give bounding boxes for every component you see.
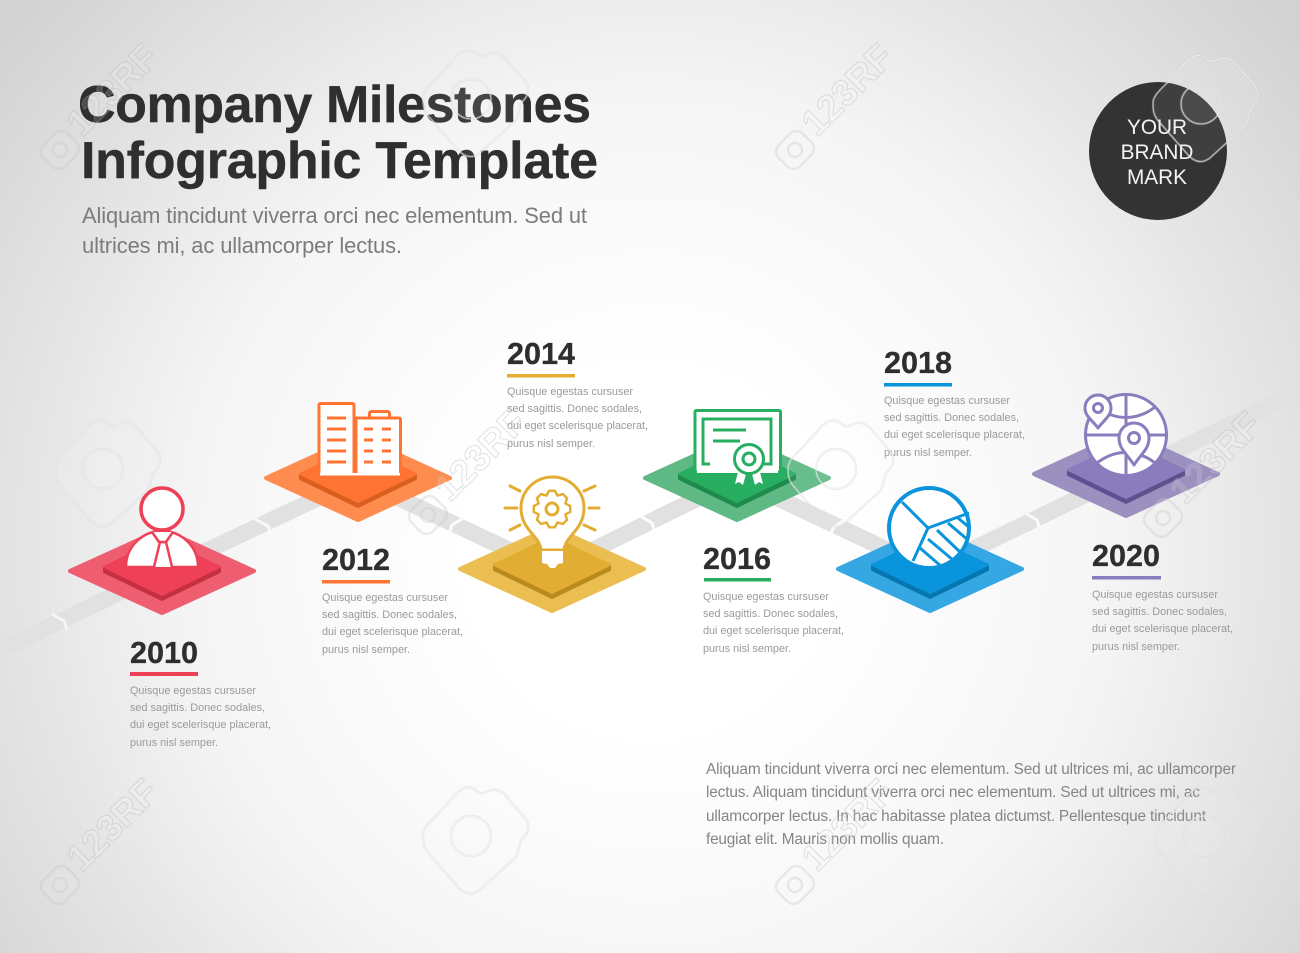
- milestone 2010 text: Quisque egestas cursuser: [130, 685, 256, 697]
- milestone 2020 text: [1092, 539, 1233, 653]
- milestone 2020 text: dui eget scelerisque placerat,: [1092, 623, 1233, 635]
- milestone 2018 text: sed sagittis. Donec sodales,: [884, 412, 1019, 424]
- milestone 2010 text: purus nisl semper.: [130, 737, 218, 749]
- bottom paragraph: feugiat elit. Mauris non mollis quam.: [706, 831, 944, 848]
- title: [78, 76, 598, 190]
- milestone 2014 platform: [460, 527, 644, 611]
- milestone 2012 platform: [266, 436, 450, 520]
- milestone 2018 text: [884, 346, 1025, 459]
- milestone 2020 text: 2020: [1092, 539, 1160, 573]
- milestone 2014 text: Quisque egestas cursuser: [507, 386, 633, 398]
- milestone 2012 text: [322, 543, 463, 656]
- milestone 2016 text: Quisque egestas cursuser: [703, 591, 829, 603]
- subtitle: [82, 203, 587, 258]
- bottom paragraph: Aliquam tincidunt viverra orci nec elementum. Sed ut ultrices mi, ac ullamcorper: [706, 761, 1236, 778]
- watermarks: 123RF: [1162, 404, 1269, 512]
- milestone 2016 text: sed sagittis. Donec sodales,: [703, 608, 838, 620]
- brand mark badge: BRAND: [1121, 141, 1193, 164]
- bottom paragraph: [706, 761, 1236, 848]
- milestone 2016 text: purus nisl semper.: [703, 643, 791, 655]
- milestone 2020 text: purus nisl semper.: [1092, 641, 1180, 653]
- icon: pie chart: [889, 488, 970, 568]
- bottom paragraph: lectus. Aliquam tincidunt viverra orci nec elementum. Sed ut ultrices mi, ac: [706, 784, 1200, 801]
- milestone 2012 text: sed sagittis. Donec sodales,: [322, 609, 457, 621]
- milestone 2014 text: dui eget scelerisque placerat,: [507, 420, 648, 432]
- milestone 2020 platform: [1034, 432, 1218, 516]
- milestone 2014 text: 2014: [507, 337, 575, 371]
- icon: globe with map pins: [1085, 394, 1166, 476]
- icon: light bulb with gear: [505, 477, 599, 568]
- title: Infographic Template: [81, 132, 598, 190]
- icon: office buildings: [319, 404, 400, 476]
- brand mark badge: YOUR: [1127, 116, 1187, 139]
- bottom paragraph: ullamcorper lectus. In hac habitasse platea dictumst. Pellentesque tincidunt: [706, 808, 1207, 825]
- milestone 2016 platform: [645, 436, 829, 520]
- milestone 2014 text: sed sagittis. Donec sodales,: [507, 403, 642, 415]
- milestone 2016 text: [703, 542, 844, 655]
- milestone 2012 text: purus nisl semper.: [322, 644, 410, 656]
- milestone 2018 text: Quisque egestas cursuser: [884, 395, 1010, 407]
- icon: certificate with seal: [695, 410, 780, 485]
- watermarks: 123RF: [427, 401, 534, 509]
- milestone 2010 text: [130, 636, 271, 749]
- brand mark badge: MARK: [1127, 166, 1187, 189]
- milestone 2012 text: 2012: [322, 543, 390, 577]
- milestone 2020 text: Quisque egestas cursuser: [1092, 589, 1218, 601]
- milestone 2010 text: sed sagittis. Donec sodales,: [130, 702, 265, 714]
- timeline road: [0, 386, 1300, 655]
- milestone 2012 text: Quisque egestas cursuser: [322, 592, 448, 604]
- subtitle: Aliquam tincidunt viverra orci nec elementum. Sed ut: [82, 203, 587, 228]
- title: Company Milestones: [78, 76, 591, 134]
- watermarks: 123RF: [59, 771, 166, 879]
- milestone 2014 text: purus nisl semper.: [507, 438, 595, 450]
- milestone 2014 text: [507, 337, 648, 450]
- milestone 2018 text: purus nisl semper.: [884, 447, 972, 459]
- brand mark badge: [1089, 82, 1227, 220]
- subtitle: ultrices mi, ac ullamcorper lectus.: [82, 233, 402, 258]
- milestone 2010 text: dui eget scelerisque placerat,: [130, 719, 271, 731]
- milestone 2018 text: dui eget scelerisque placerat,: [884, 429, 1025, 441]
- milestone 2016 text: 2016: [703, 542, 771, 576]
- milestone 2020 text: sed sagittis. Donec sodales,: [1092, 606, 1227, 618]
- watermarks: 123RF: [794, 771, 901, 879]
- milestone 2018 text: 2018: [884, 346, 952, 380]
- watermarks: 123RF: [794, 36, 901, 144]
- milestone 2018 platform: [838, 527, 1022, 611]
- icon: businessman: [120, 488, 204, 571]
- watermarks: 123RF: [59, 36, 166, 144]
- milestone 2012 text: dui eget scelerisque placerat,: [322, 626, 463, 638]
- milestone 2010 platform: [70, 529, 254, 613]
- milestone 2016 text: dui eget scelerisque placerat,: [703, 625, 844, 637]
- milestone 2010 text: 2010: [130, 636, 198, 670]
